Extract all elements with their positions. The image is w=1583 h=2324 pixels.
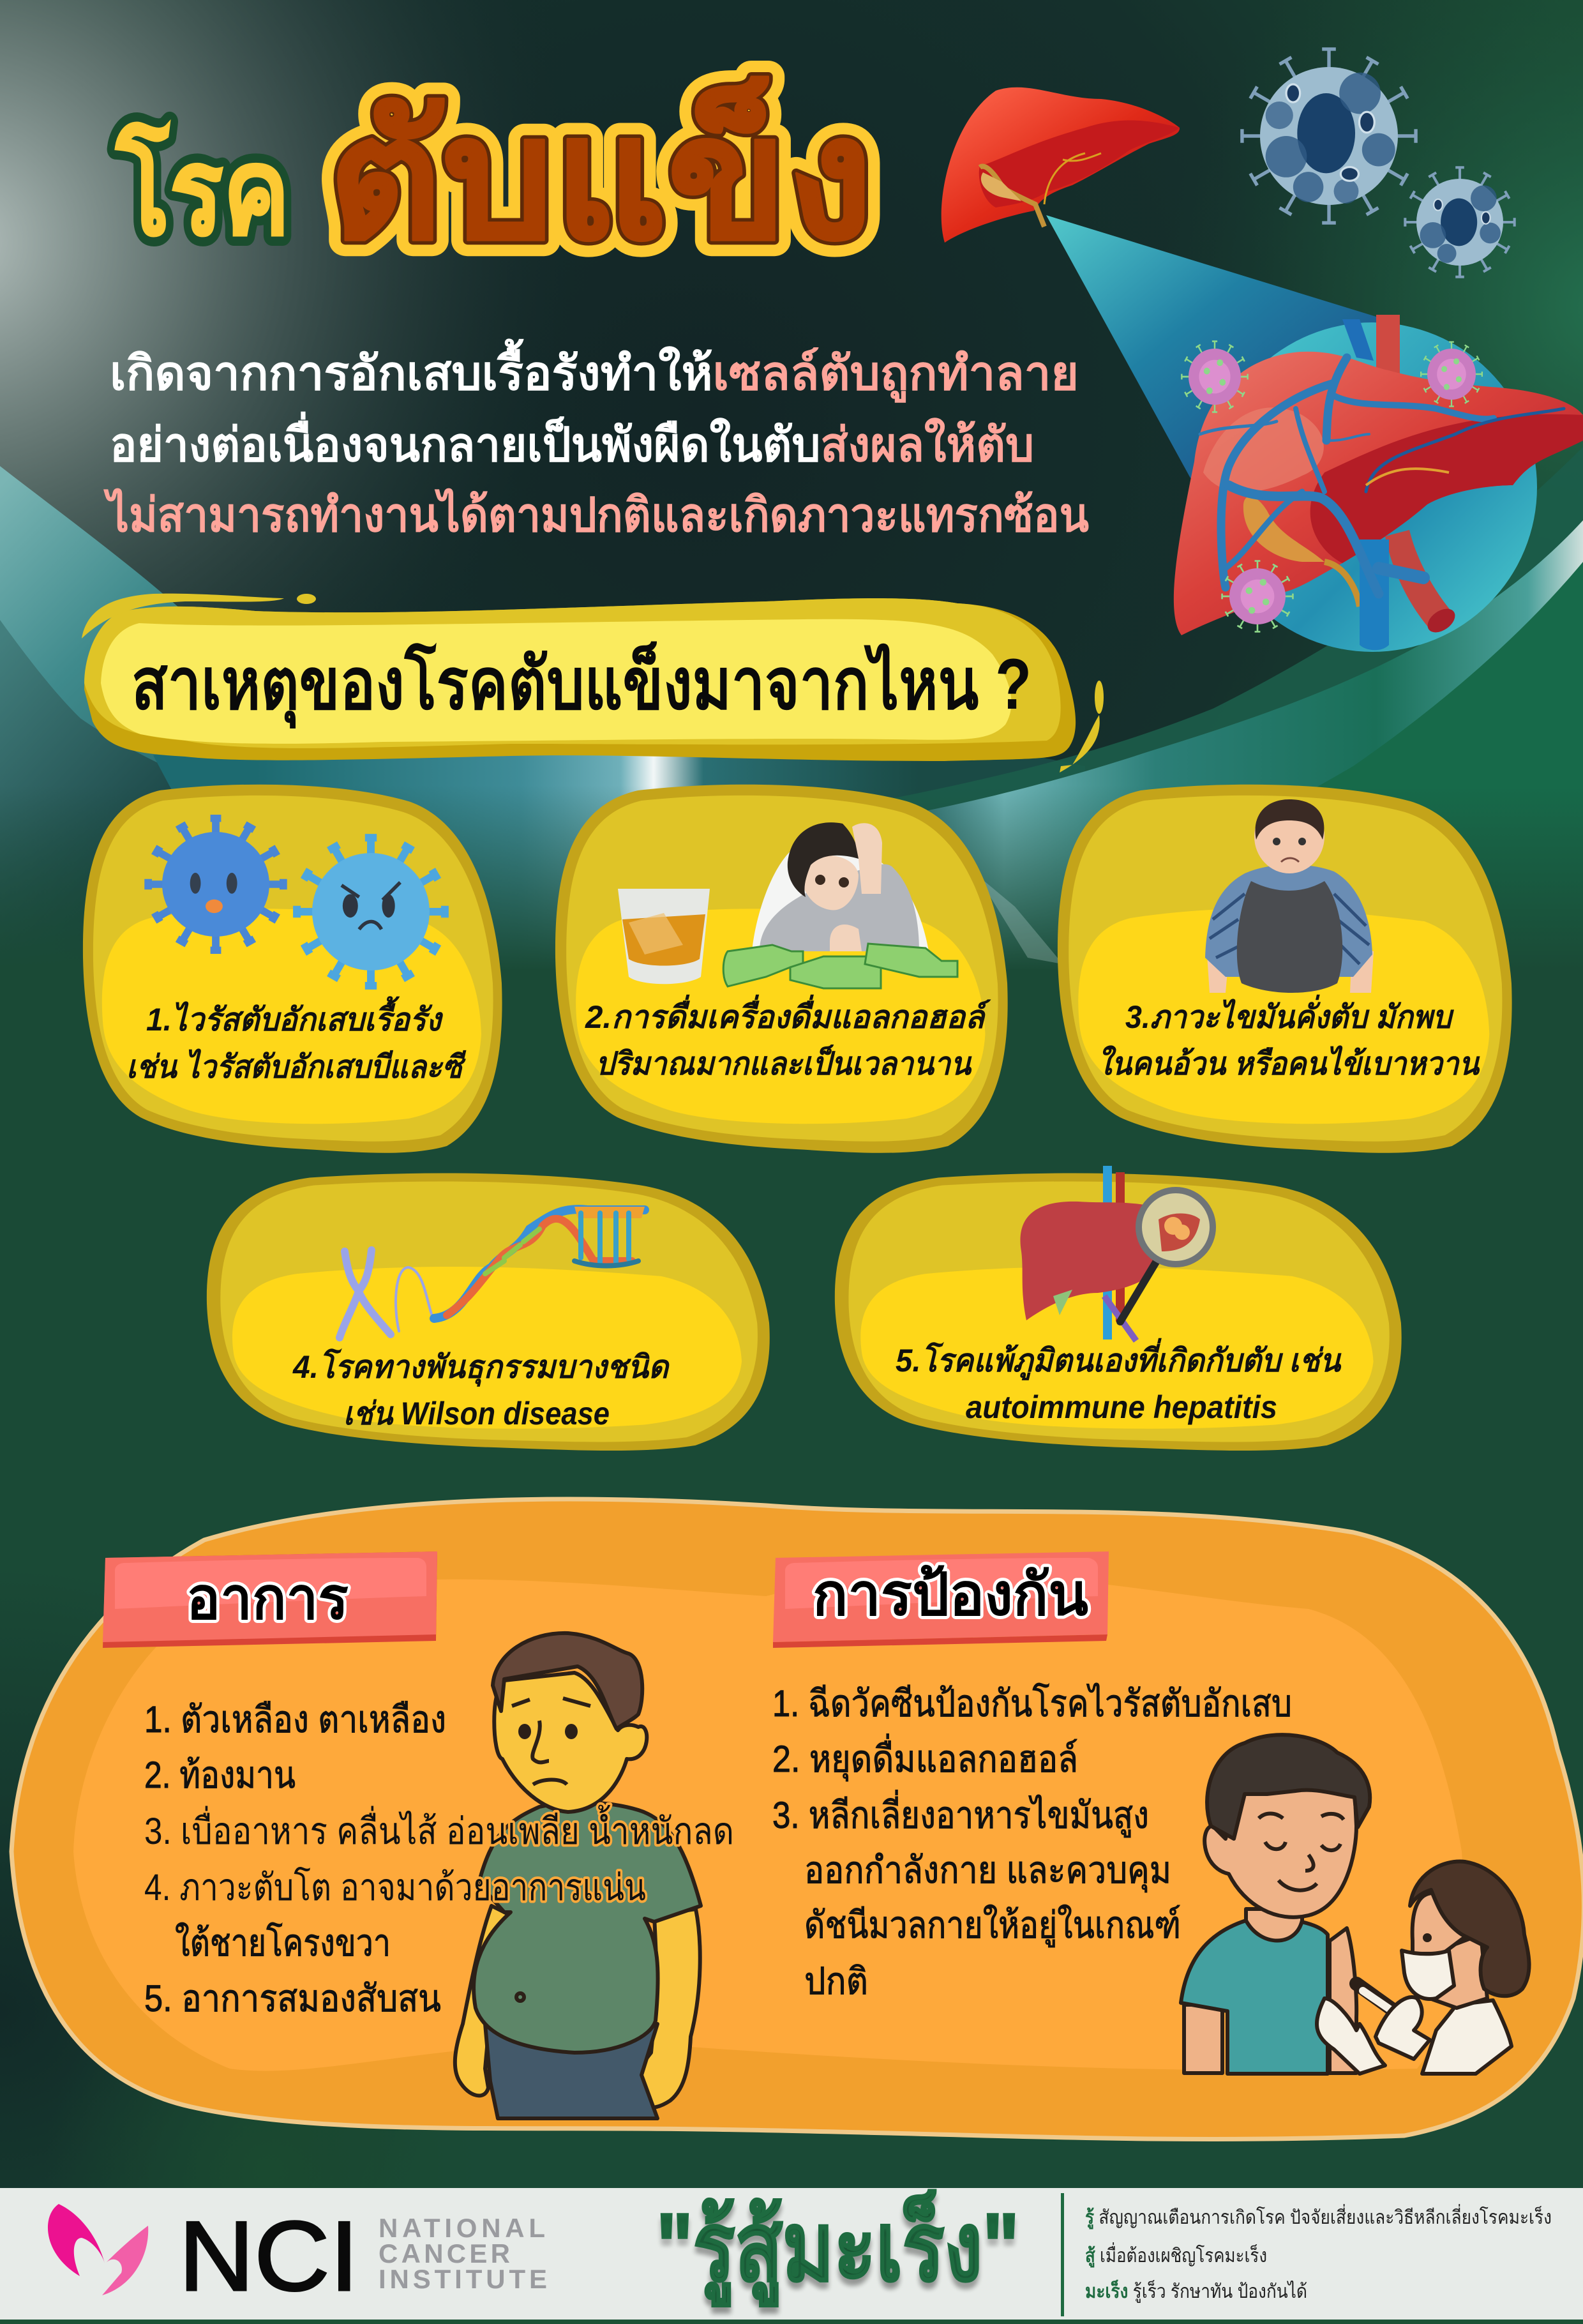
list: prevention: 1. ฉีดวัคซีนป้องกันโรคไวรัสตับอักเสบ <box>772 1682 1292 1724</box>
tag: symptoms <box>103 1551 437 1648</box>
panel: cause 5 <box>835 1166 1402 1451</box>
icon: chromosome <box>340 1250 434 1338</box>
text: cause 4 <box>292 1348 670 1431</box>
logo: NCI wordmark: NCI <box>179 2201 359 2311</box>
icon: small liver <box>942 87 1180 243</box>
title: ตับแข็ง: ตับแข็ง <box>328 75 873 274</box>
logo: institute name <box>379 2213 547 2294</box>
logo: institute name: NATIONAL <box>379 2213 545 2243</box>
list: prevention: 3. หลีกเลี่ยงอาหารไขมันสูง <box>772 1790 1149 1837</box>
icon: pink virus bottom <box>1222 561 1293 631</box>
intro paragraph: อย่างต่อเนื่องจนกลายเป็นพังผืดในตับส่งผลให้ตับ <box>110 412 1034 471</box>
panel: symptoms and prevention <box>11 1499 1583 2139</box>
list: symptoms: 3. เบื่ออาหาร คลื่นไส้ อ่อนเพลีย น้ำหนักลด <box>144 1805 734 1852</box>
list: symptoms: 1. ตัวเหลือง ตาเหลือง <box>144 1699 446 1740</box>
list: prevention: ออกกำลังกาย และควบคุม <box>804 1850 1171 1893</box>
list: prevention: 2. หยุดดื่มแอลกอฮอล์ <box>772 1733 1078 1782</box>
logo: institute name: CANCER <box>379 2238 510 2268</box>
logo: NCI butterfly <box>48 2204 148 2295</box>
title: ตับแข็ง: ตับแข็ง <box>328 75 873 274</box>
icon: angry blue virus <box>297 838 445 986</box>
list: symptoms: 2. ท้องมาน <box>144 1754 296 1796</box>
illustration: vaccinated boy <box>1181 1735 1370 2074</box>
text: cause 2: 2.การดื่มเครื่องดื่มแอลกอฮอล์ <box>585 994 991 1035</box>
panel: cause 3 <box>1058 785 1512 1153</box>
intro paragraph <box>104 339 1089 541</box>
logo: institute name: INSTITUTE <box>379 2264 547 2294</box>
illustration: sick man <box>455 1633 701 2118</box>
footer divider <box>1061 2193 1064 2316</box>
text: cause 5: 5.โรคแพ้ภูมิตนเองที่เกิดกับตับ เช่น <box>896 1338 1342 1380</box>
magnifying cone and circle <box>1046 215 1537 652</box>
icon: whisky glass <box>618 889 710 984</box>
footer notes: มะเร็ง รู้เร็ว รักษาทัน ป้องกันได้ <box>1085 2279 1307 2303</box>
footer notes <box>1085 2204 1552 2303</box>
intro paragraph: เกิดจากการอักเสบเรื้อรังทำให้เซลล์ตับถูกทำลาย <box>110 339 1079 402</box>
tag: prevention: การป้องกัน <box>813 1562 1088 1627</box>
panel: cause 2 <box>555 785 1008 1153</box>
text: cause 5 <box>896 1338 1342 1425</box>
tag: prevention <box>773 1551 1109 1648</box>
list: symptoms: 4. ภาวะตับโต อาจมาด้วยอาการแน่น <box>144 1866 646 1908</box>
text: cause 1 <box>126 996 467 1085</box>
text: cause 3: 3.ภาวะไขมันคั่งตับ มักพบ <box>1125 994 1455 1035</box>
list: symptoms <box>144 1699 734 2019</box>
icon: overweight man <box>1205 799 1374 993</box>
text: cause 4: 4.โรคทางพันธุกรรมบางชนิด <box>292 1348 670 1387</box>
illustration: nurse <box>1317 1862 1529 2074</box>
list: prevention <box>772 1682 1292 2002</box>
icon: big liver <box>1174 315 1583 650</box>
panel: cause 1 <box>83 785 502 1153</box>
icon: big virus <box>1242 49 1416 223</box>
text: cause 3 <box>1097 994 1480 1082</box>
icon: small virus <box>1405 167 1515 277</box>
icon: hungover man <box>752 822 929 951</box>
list: prevention: ดัชนีมวลกายให้อยู่ในเกณฑ์ <box>804 1904 1181 1947</box>
text: cause 3: ในคนอ้วน หรือคนไข้เบาหวาน <box>1097 1045 1480 1082</box>
icon: pink virus left <box>1182 342 1248 412</box>
icon: sad blue virus <box>148 819 283 950</box>
heading banner: สาเหตุของโรคตับแข็งมาจากไหน ? <box>131 641 1032 729</box>
icon: pink virus right <box>1421 342 1482 406</box>
panel: cause 4 <box>207 1173 770 1451</box>
footer notes: สู้ เมื่อต้องเผชิญโรคมะเร็ง <box>1085 2242 1267 2268</box>
title: โรค: โรค <box>115 121 290 260</box>
intro paragraph: ไม่สามารถทำงานได้ตามปกติและเกิดภาวะแทรกซ้อน <box>104 488 1089 541</box>
list: symptoms: ใต้ชายโครงขวา <box>175 1922 391 1964</box>
icon: green bottles <box>723 944 957 988</box>
heading banner <box>82 594 1104 773</box>
list: prevention: ปกติ <box>804 1961 868 2002</box>
text: cause 2: ปริมาณมากและเป็นเวลานาน <box>596 1044 972 1082</box>
text: cause 4: เช่น Wilson disease <box>343 1396 610 1431</box>
text: cause 1: เช่น ไวรัสตับอักเสบบีและซี <box>126 1048 467 1085</box>
tag: symptoms: อาการ <box>186 1566 349 1631</box>
text: cause 2 <box>585 994 991 1082</box>
slogan: "รู้สู้มะเร็ง" <box>656 2190 1019 2307</box>
title: ตับแข็ง: ตับแข็ง <box>328 75 873 274</box>
list: symptoms: 5. อาการสมองสับสน <box>144 1978 441 2019</box>
text: cause 5: autoimmune hepatitis <box>966 1389 1277 1425</box>
icon: DNA helix <box>434 1207 645 1318</box>
footer <box>0 2188 1583 2324</box>
icon: liver with magnifier <box>1020 1166 1213 1341</box>
text: cause 1: 1.ไวรัสตับอักเสบเรื้อรัง <box>146 996 443 1038</box>
title: โรค: โรค <box>115 121 290 260</box>
